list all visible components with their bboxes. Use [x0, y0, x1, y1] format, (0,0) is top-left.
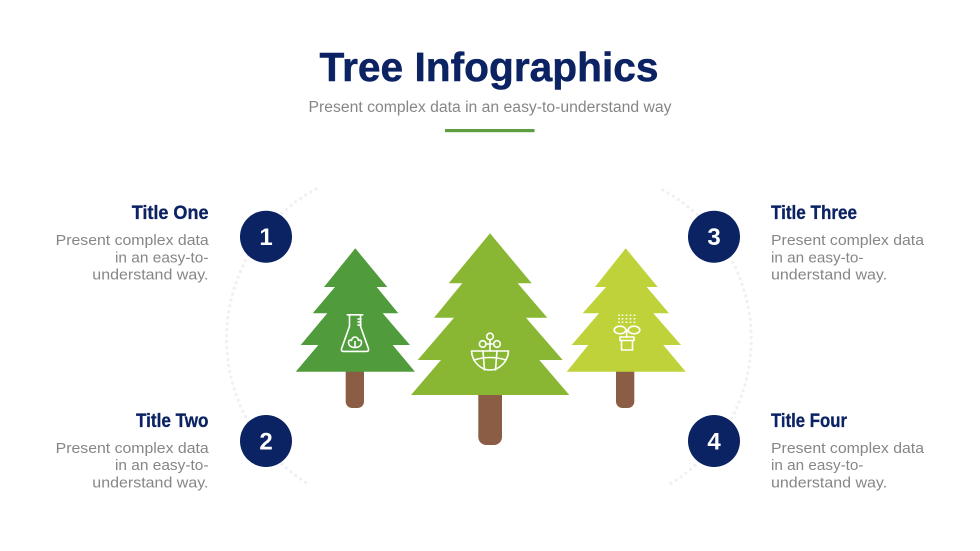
number badge 1 [240, 211, 292, 263]
text: title two description: understand way. [92, 474, 208, 491]
panel: title three [771, 203, 925, 284]
text: title two description [56, 440, 209, 491]
icon: plant in globe bowl [472, 333, 508, 370]
text: title four description: Present complex data [771, 440, 925, 457]
text: title one description: in an easy-to- [115, 249, 208, 266]
text: title one description [56, 232, 209, 284]
number badge 3 [688, 211, 740, 263]
panel: title four [771, 411, 925, 491]
heading: title two: Title Two [136, 411, 208, 432]
number badge 2: 2 [259, 428, 273, 456]
number badge 1: 1 [259, 224, 273, 251]
panel: title one [56, 203, 209, 284]
text: title four description [771, 440, 925, 491]
text: title two description: Present complex data [56, 440, 209, 457]
text: title three description [771, 232, 925, 284]
subtitle: Present complex data in an easy-to-understand way [308, 99, 672, 116]
icon: flask with lotus [341, 315, 369, 351]
text: title four description: understand way. [771, 474, 887, 491]
text: title one description: Present complex data [56, 232, 209, 249]
heading: title three: Title Three [771, 203, 857, 224]
number badge 4: 4 [707, 428, 721, 456]
text: title three description: in an easy-to- [771, 249, 864, 266]
text: title two description: in an easy-to- [115, 457, 208, 474]
icon: watered potted plant [614, 314, 640, 350]
heading: title one: Title One [132, 203, 208, 224]
number badge 2 [240, 415, 292, 467]
text: title three description: understand way. [771, 266, 887, 284]
text: title one description: understand way. [92, 266, 208, 284]
tree: left dark green [296, 248, 415, 408]
text: title three description: Present complex data [771, 232, 925, 249]
tree: right lime green [567, 248, 686, 408]
number badge 3: 3 [707, 224, 721, 251]
number badge 4 [688, 415, 740, 467]
title: Tree Infographics [320, 44, 658, 90]
tree: centre mid green [411, 233, 569, 445]
text: title four description: in an easy-to- [771, 457, 864, 474]
title underline [445, 129, 534, 132]
panel: title two [56, 411, 209, 491]
heading: title four: Title Four [771, 411, 848, 432]
